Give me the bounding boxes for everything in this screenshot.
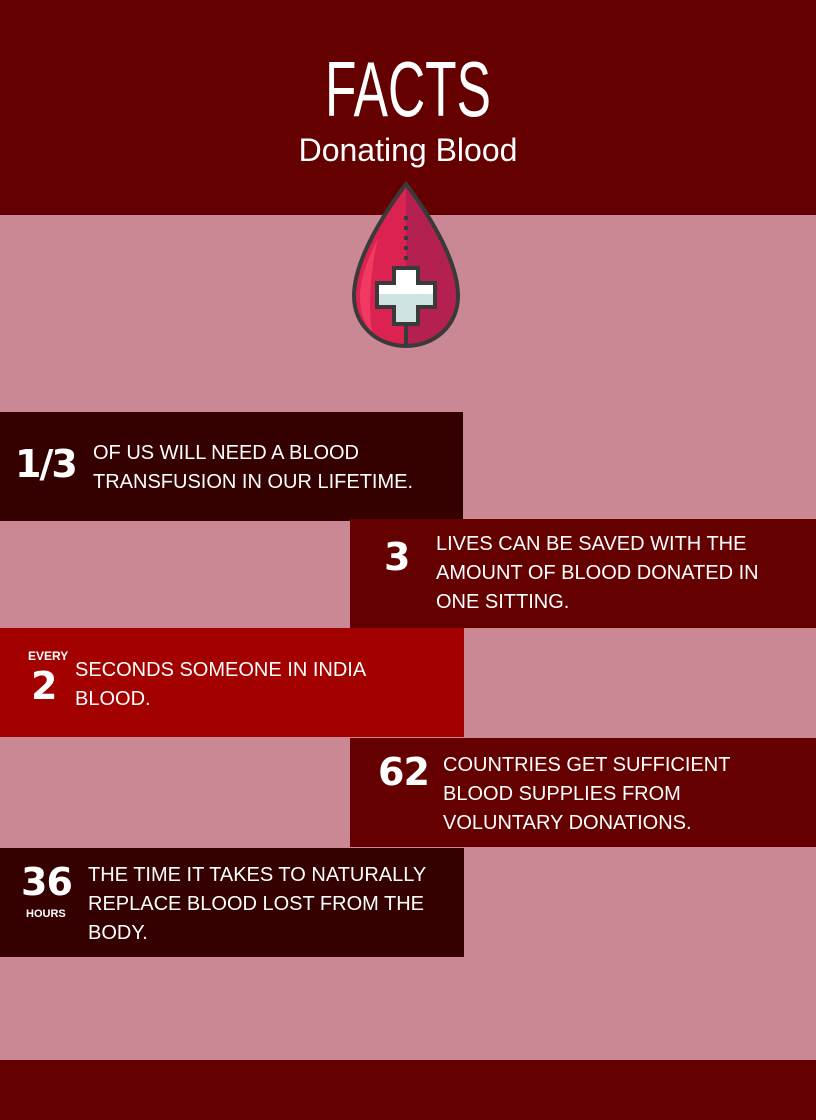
text: BODY. [88, 922, 148, 944]
number: 62 [378, 750, 429, 794]
text: VOLUNTARY DONATIONS. [443, 812, 692, 834]
text: THE TIME IT TAKES TO NATURALLY [88, 864, 426, 886]
title: FACTS [325, 45, 491, 133]
text: AMOUNT OF BLOOD DONATED IN [436, 562, 759, 584]
text [75, 659, 366, 710]
text: LIVES CAN BE SAVED WITH THE [436, 533, 746, 555]
text [443, 754, 730, 834]
panel: fact 36 hours [0, 848, 464, 957]
text: TRANSFUSION IN OUR LIFETIME. [93, 471, 413, 493]
panel: fact every 2: 2 [31, 664, 57, 708]
text: REPLACE BLOOD LOST FROM THE [88, 893, 424, 915]
text [93, 442, 413, 493]
text: OF US WILL NEED A BLOOD [93, 442, 359, 464]
text: ONE SITTING. [436, 591, 569, 613]
number: 1/3 [15, 442, 76, 486]
number: EVERY [28, 649, 68, 663]
panel: fact 1/3 [0, 412, 463, 521]
number: 3 [384, 535, 410, 579]
footer band [0, 1060, 816, 1120]
icon: blood drop with cross [352, 180, 460, 348]
panel: fact 62 [350, 738, 816, 847]
panel: fact 3 [350, 519, 816, 628]
text [436, 533, 759, 613]
text: SECONDS SOMEONE IN INDIA [75, 659, 366, 681]
text: BLOOD SUPPLIES FROM [443, 783, 681, 805]
subtitle: Donating Blood [299, 132, 517, 168]
text [88, 864, 426, 944]
panel: fact every 2 [0, 628, 464, 737]
text: COUNTRIES GET SUFFICIENT [443, 754, 730, 776]
header band [0, 0, 816, 215]
panel: fact 36 hours: HOURS [26, 908, 66, 920]
number: 36 [21, 860, 72, 904]
text: BLOOD. [75, 688, 151, 710]
